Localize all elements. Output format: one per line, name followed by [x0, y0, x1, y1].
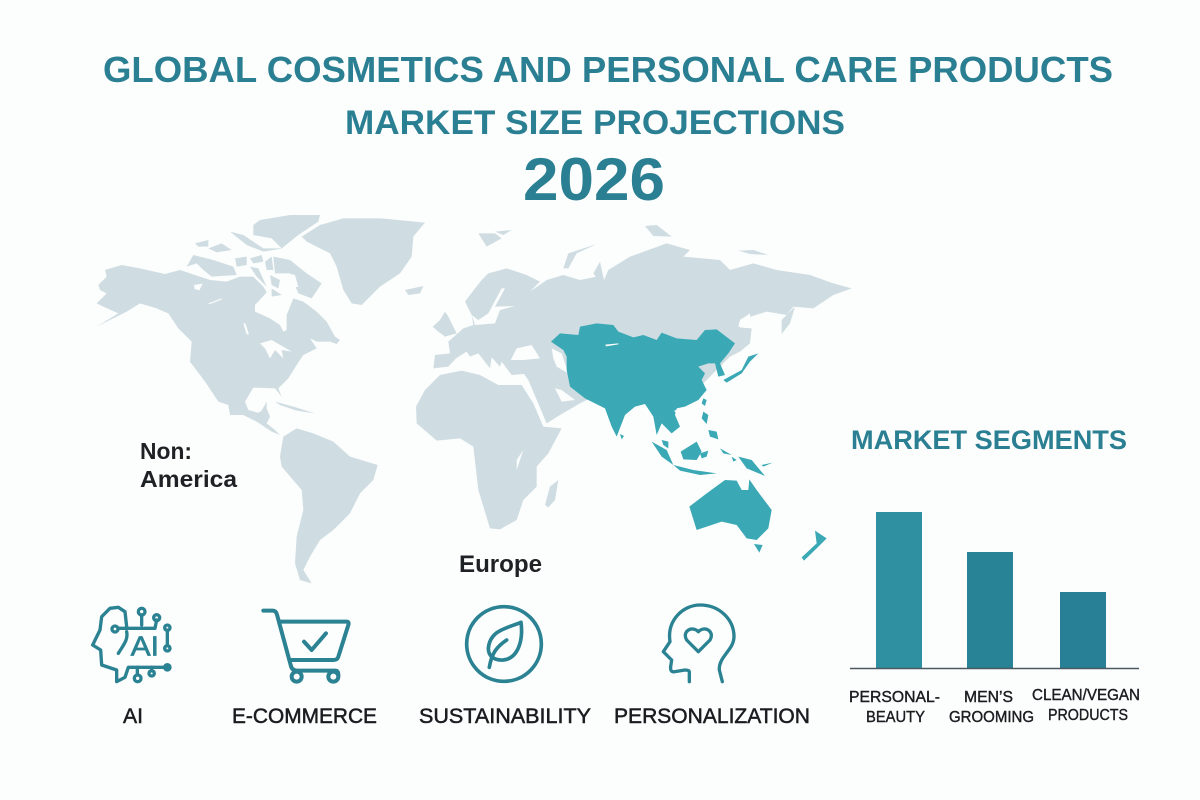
world map: [97, 215, 852, 583]
icon labels: [123, 705, 810, 728]
bar: clean/vegan products: [1060, 592, 1106, 668]
map label: Europe: Europe: [459, 551, 542, 578]
trend icons row: [93, 605, 810, 728]
icon: AI head: [93, 607, 170, 682]
map label: North America: [140, 438, 237, 492]
title: MARKET SIZE PROJECTIONS: [345, 104, 845, 142]
bar labels: PERSONAL-: [849, 689, 940, 706]
bar chart: [849, 512, 1140, 726]
bar labels: [849, 687, 1140, 726]
icon labels: SUSTAINABILITY: [419, 705, 591, 728]
icon labels: AI: [123, 705, 143, 728]
map: North America: [97, 215, 340, 415]
map: Eurasia and Africa: [416, 225, 852, 529]
bar labels: GROOMING: [949, 709, 1034, 726]
map: Greenland and South America: [240, 218, 425, 583]
bar: men's grooming: [967, 552, 1013, 668]
market segments heading: MARKET SEGMENTS: [851, 425, 1127, 455]
icon: head with heart: [663, 605, 734, 682]
icon labels: PERSONALIZATION: [614, 705, 810, 728]
icon: shopping cart: [263, 611, 349, 682]
title: [103, 49, 1113, 213]
bar labels: CLEAN/VEGAN: [1032, 687, 1140, 704]
title: 2026: [523, 146, 665, 213]
bar: personal beauty: [876, 512, 922, 668]
icon: AI head: AI: [131, 631, 159, 662]
bar labels: MEN’S: [964, 689, 1013, 706]
map label: North America: America: [140, 466, 237, 492]
icon: leaf in circle: [467, 607, 541, 681]
title: GLOBAL COSMETICS AND PERSONAL CARE PRODUCTS: [103, 49, 1113, 90]
bar labels: BEAUTY: [866, 709, 925, 726]
map: Asia-Pacific highlighted: [551, 323, 827, 561]
map label: North America: Non:: [140, 438, 192, 464]
icon labels: E-COMMERCE: [232, 705, 377, 728]
bar labels: PRODUCTS: [1048, 707, 1128, 724]
